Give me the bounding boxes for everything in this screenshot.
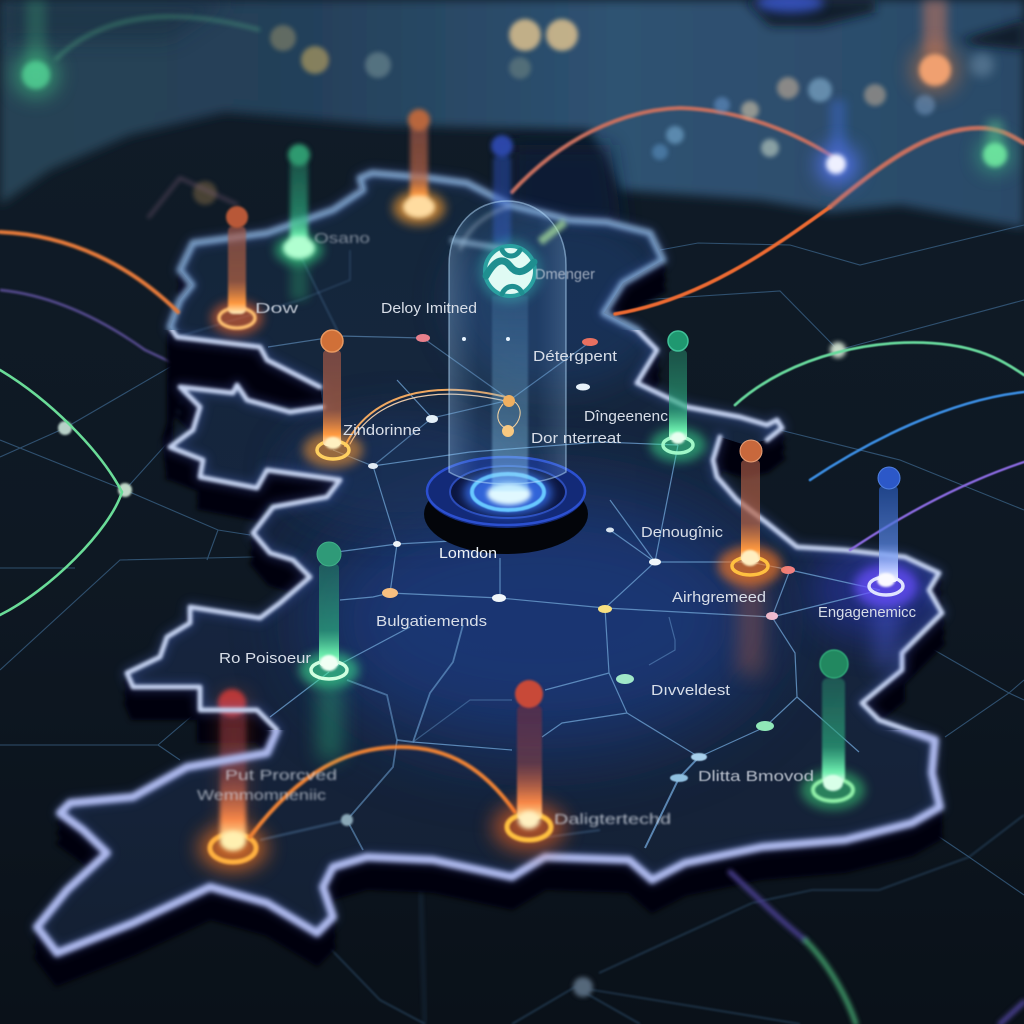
label: Dmenger: Dmenger — [535, 267, 595, 283]
pin: far south-west red, behind coast — [199, 689, 267, 870]
pin: east orange — [718, 440, 782, 675]
label: London: Lomdon — [439, 546, 497, 562]
map labels — [197, 231, 916, 828]
pin: north orange — [393, 109, 445, 225]
pin: east blue — [854, 467, 918, 670]
green reflection on capsule — [540, 222, 565, 242]
map land surface — [37, 173, 950, 953]
pin: south-east green — [801, 650, 865, 810]
capsule emblem — [478, 239, 542, 303]
blurred background beacons — [14, 0, 1011, 218]
label: Denougînic: Denougînic — [641, 525, 723, 541]
label: Osano: Osano — [314, 231, 370, 247]
label: Dow: Dow — [255, 301, 299, 317]
label: Bulgatiemends: Bulgatiemends — [376, 614, 487, 630]
central hologram beacon — [424, 201, 588, 554]
label: Deloy Imitned: Deloy Imitned — [381, 301, 477, 317]
label: Wemmomneniic: Wemmomneniic — [197, 788, 326, 804]
map network lines — [177, 250, 880, 850]
pin: west orange — [303, 330, 363, 468]
capsule highlight — [460, 206, 510, 250]
label: Dlitta Bmovod: Dlitta Bmovod — [698, 769, 814, 785]
label: Détergpent: Détergpent — [533, 349, 617, 365]
label: Airhgremeed: Airhgremeed — [672, 590, 766, 606]
label: Ro Poisoeur: Ro Poisoeur — [219, 651, 311, 667]
coast seen through capsule — [450, 240, 512, 250]
label: Duveldest: Dıvveldest — [651, 683, 730, 699]
capsule inner column — [492, 296, 528, 491]
beacon base — [424, 456, 588, 554]
blurred upper land mass — [0, 0, 1024, 228]
pin: north green — [275, 144, 323, 300]
capsule inner nodes — [462, 337, 520, 437]
pin: blue behind capsule — [491, 135, 513, 245]
glowing map outline — [37, 173, 942, 953]
pin: north-west red — [211, 206, 263, 335]
glass capsule — [449, 201, 566, 484]
map network nodes — [58, 334, 846, 997]
label: Zindorinne: Zindorinne — [343, 423, 421, 439]
dark map extrusion — [37, 183, 942, 983]
label: Engagenemicc: Engagenemicc — [818, 605, 916, 621]
purple background line — [0, 290, 240, 382]
pin: south-west green — [299, 542, 359, 760]
label: Dîngeenenc: Dîngeenenc — [584, 409, 668, 425]
pin: centre-east green — [650, 331, 706, 462]
label: Daligtertechd: Daligtertechd — [554, 812, 671, 828]
label: Dor nterreat: Dor nterreat — [531, 431, 621, 447]
pin: south red — [493, 680, 565, 851]
background network lines — [0, 225, 1024, 1024]
label: Put Prorcved: Put Prorcved — [225, 768, 337, 784]
